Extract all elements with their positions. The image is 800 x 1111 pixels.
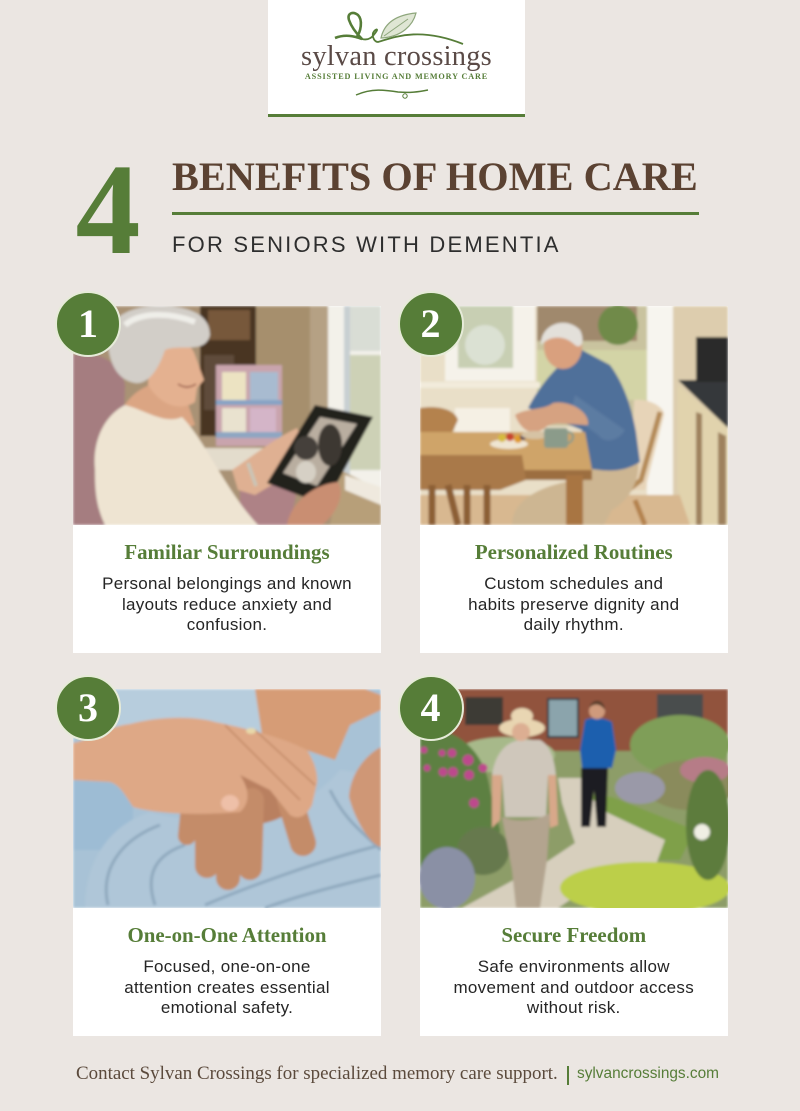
description: emotional safety.: [161, 998, 293, 1017]
photo: woman holding family portrait: [73, 306, 381, 525]
heading: Familiar Surroundings: [124, 540, 330, 564]
heading: One-on-One Attention: [127, 923, 327, 947]
description: without risk.: [527, 998, 621, 1017]
description: Personal belongings and known: [102, 574, 352, 593]
footer divider: [567, 1066, 569, 1085]
photo: woman walking a garden path with caregiver: [420, 689, 728, 908]
title rule: [172, 212, 699, 215]
description: confusion.: [187, 615, 267, 634]
description: daily rhythm.: [524, 615, 624, 634]
description: Focused, one-on-one: [143, 957, 311, 976]
description: habits preserve dignity and: [468, 595, 679, 614]
description: attention creates essential: [124, 978, 330, 997]
description: [453, 957, 694, 1017]
subtitle: FOR SENIORS WITH DEMENTIA: [172, 232, 561, 257]
description: [102, 574, 352, 634]
panel: secure freedom: [420, 689, 728, 1036]
description: [124, 957, 330, 1017]
title: BENEFITS OF HOME CARE: [172, 154, 698, 199]
photo: man eating breakfast at kitchen table: [420, 306, 728, 525]
description: Safe environments allow: [478, 957, 670, 976]
logo icon: swirl and leaf: [334, 12, 464, 99]
photo: caregiver hand resting on elderly hand: [73, 689, 381, 908]
number badge 1: [55, 291, 121, 357]
panel: one-on-one attention: [73, 689, 381, 1036]
number badge 1: 1: [78, 301, 98, 346]
description: [468, 574, 679, 634]
description: Custom schedules and: [484, 574, 663, 593]
logo tagline: ASSISTED LIVING AND MEMORY CARE: [305, 72, 488, 81]
heading: Secure Freedom: [501, 923, 646, 947]
footer contact line: Contact Sylvan Crossings for specialized memory care support.: [76, 1063, 558, 1084]
footer website: sylvancrossings.com: [577, 1065, 719, 1082]
panel: familiar surroundings: [73, 306, 381, 653]
number badge 2: [398, 291, 464, 357]
description: movement and outdoor access: [453, 978, 694, 997]
heading: Personalized Routines: [475, 540, 673, 564]
big numeral 4: 4: [76, 138, 140, 282]
number badge 4: [398, 675, 464, 741]
number badge 2: 2: [420, 301, 440, 346]
logo wordmark: sylvan crossings: [301, 41, 492, 72]
description: layouts reduce anxiety and: [122, 595, 332, 614]
number badge 4: 4: [420, 685, 440, 730]
logo panel: [268, 0, 525, 117]
panel: personalized routines: [420, 306, 728, 653]
logo underline: [268, 114, 525, 117]
number badge 3: 3: [78, 685, 98, 730]
number badge 3: [55, 675, 121, 741]
